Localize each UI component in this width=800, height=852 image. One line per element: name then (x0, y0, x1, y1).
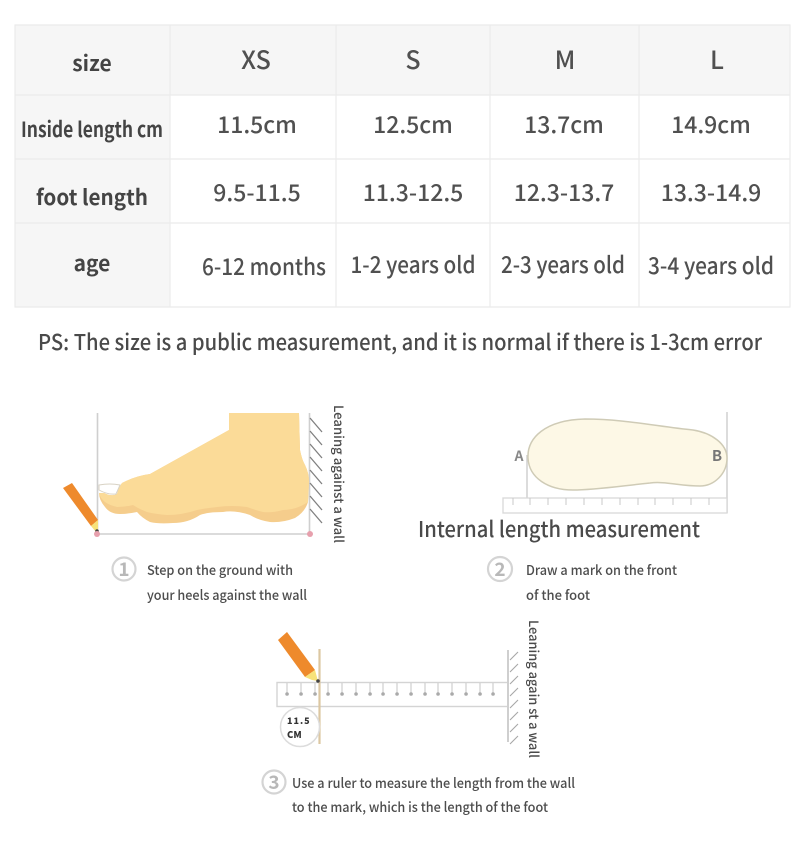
wall hatching (310, 418, 322, 523)
foot upper highlight (99, 413, 309, 515)
row: foot length: 11.3-12.5 (363, 174, 463, 208)
row: age: 1-2 years old (350, 246, 476, 280)
step 1 caption (112, 555, 307, 604)
measurement badge: 11.5 (287, 714, 311, 727)
number badge 3 (262, 768, 286, 795)
ruler (503, 498, 727, 513)
ruler (277, 682, 508, 706)
step 3 caption (262, 768, 575, 816)
row: age: 2-3 years old (501, 246, 625, 280)
step 1 illustration: foot against wall (63, 405, 349, 543)
wall hatching (510, 652, 518, 744)
measurement badge: CM (287, 727, 302, 741)
internal length heading: Internal length measurement (418, 512, 700, 544)
number badge 1: 1 (118, 555, 130, 582)
row: size: XS (241, 41, 271, 77)
row: age: age (74, 248, 110, 278)
step 2 caption: of the foot (526, 584, 591, 604)
row: size: S (405, 41, 421, 77)
row: foot length: 12.3-13.7 (514, 174, 614, 208)
label A: A (514, 446, 525, 466)
step 2 caption: Draw a mark on the front (526, 559, 678, 579)
row: inside length: 12.5cm (373, 106, 453, 140)
row: age: 3-4 years old (648, 247, 774, 281)
size table (15, 25, 790, 307)
footprint (528, 419, 727, 490)
row: inside length: 13.7cm (524, 106, 604, 140)
measurement badge (280, 708, 320, 746)
number badge 1 (112, 555, 136, 582)
row: age: 6-12 months (202, 248, 326, 282)
row: size: size (72, 48, 112, 78)
pencil (63, 483, 99, 533)
step 2 caption (488, 555, 678, 604)
row: inside length: 14.9cm (671, 106, 751, 140)
guide lines (527, 412, 727, 513)
number badge 2: 2 (494, 555, 506, 582)
label B: B (712, 445, 722, 466)
row: foot length: 13.3-14.9 (661, 174, 761, 208)
measuring frame lines (98, 413, 310, 534)
row: foot length (36, 174, 761, 212)
row: size: L (710, 41, 724, 77)
step 3 caption: Use a ruler to measure the length from the wall (292, 772, 575, 792)
row: foot length: foot length (36, 181, 148, 212)
foot (99, 413, 309, 523)
step 1 caption: Step on the ground with (147, 559, 293, 579)
table shaded header and label cells (15, 25, 790, 307)
wall label: Leaning again st a wall (525, 620, 544, 758)
row: foot length: 9.5-11.5 (213, 174, 301, 208)
wall label: Leaning against a wall (330, 405, 349, 543)
pencil (278, 632, 320, 683)
row: size: M (555, 41, 575, 77)
row: inside length (21, 106, 751, 144)
row: inside length: Inside length cm (21, 114, 163, 144)
toenail (99, 484, 120, 494)
mark line (318, 649, 321, 744)
step 2 illustration: footprint outline (503, 412, 727, 513)
row: inside length: 11.5cm (217, 106, 297, 140)
wall line (507, 650, 509, 742)
marker dots (94, 531, 100, 537)
row: size (72, 41, 724, 78)
step 3 caption: to the mark, which is the length of the foot (292, 796, 549, 816)
number badge 3: 3 (268, 768, 280, 795)
step 1 caption: your heels against the wall (147, 584, 307, 604)
number badge 2 (488, 555, 512, 582)
step 3 illustration: ruler measurement (277, 620, 544, 758)
row: age (74, 246, 774, 282)
